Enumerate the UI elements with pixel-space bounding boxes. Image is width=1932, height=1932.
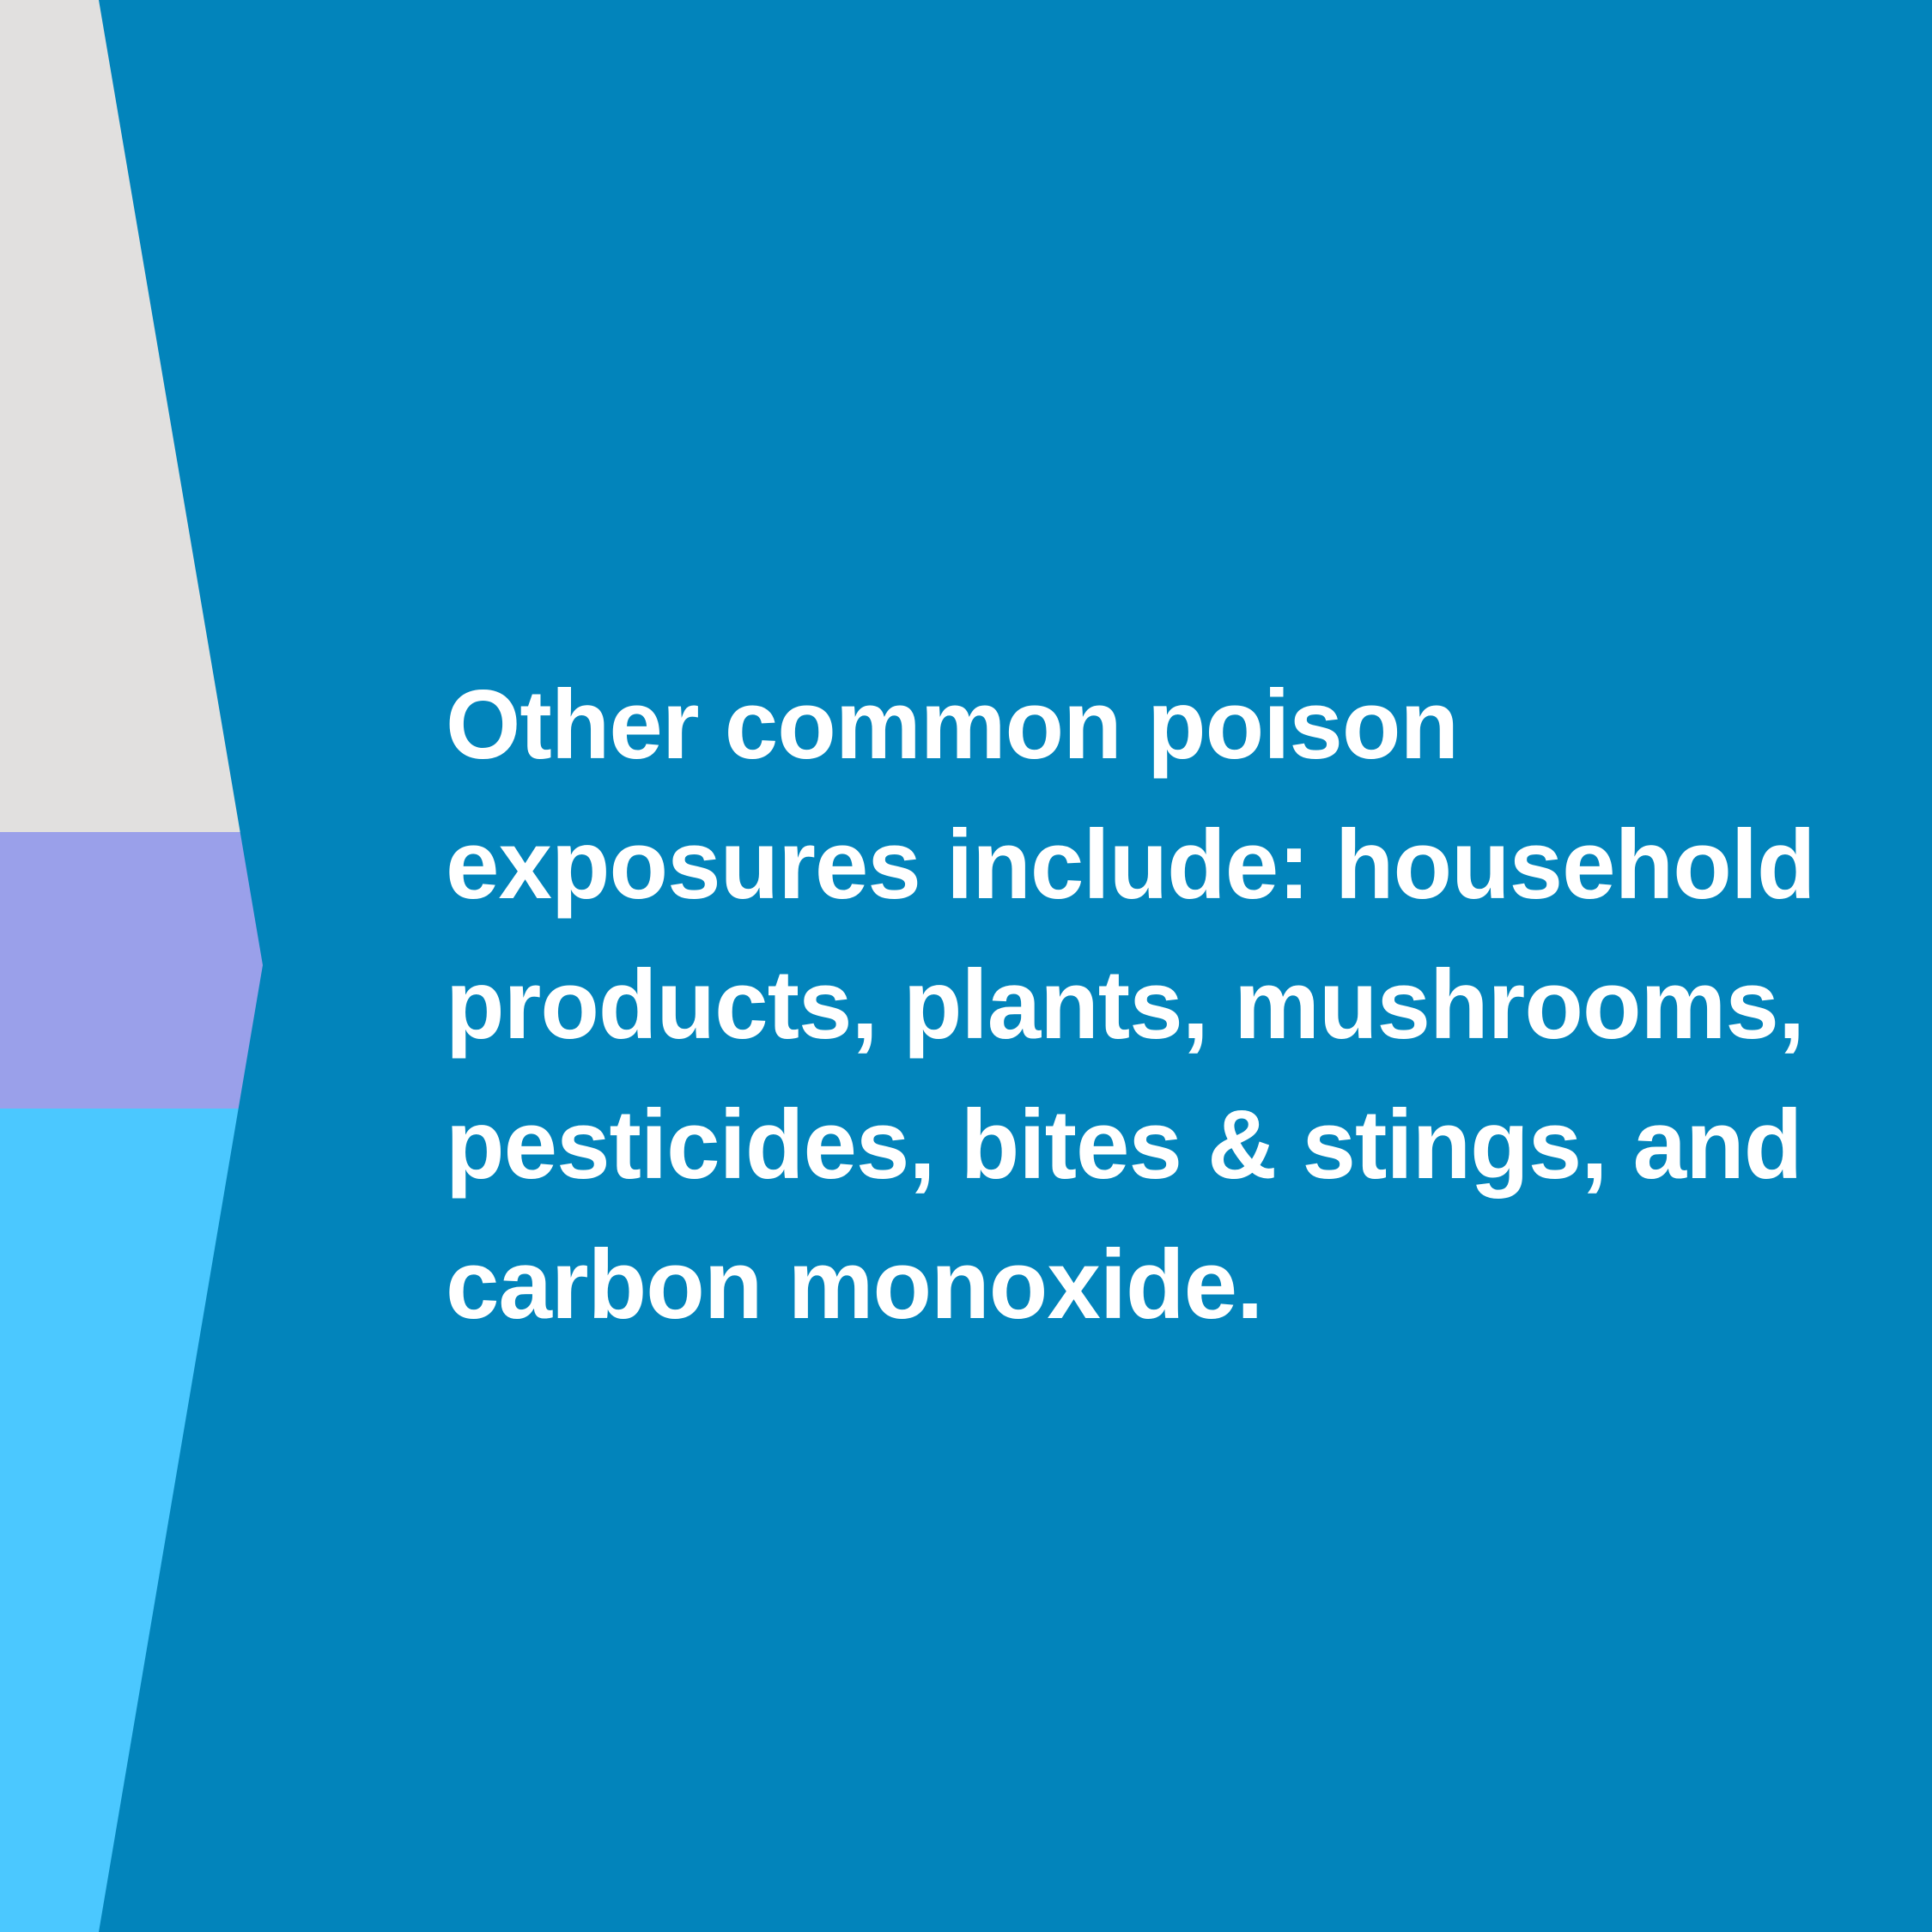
- text block: poison exposures: products, plants, mushrooms,: [446, 951, 1804, 1060]
- text block: poison exposures: pesticides, bites & stings, and: [446, 1091, 1801, 1200]
- text block: poison exposures: exposures include: household: [446, 811, 1815, 920]
- text block: poison exposures: carbon monoxide.: [446, 1230, 1262, 1340]
- text block: poison exposures: Other common poison: [446, 671, 1458, 780]
- text block: poison exposures: [446, 671, 1815, 1340]
